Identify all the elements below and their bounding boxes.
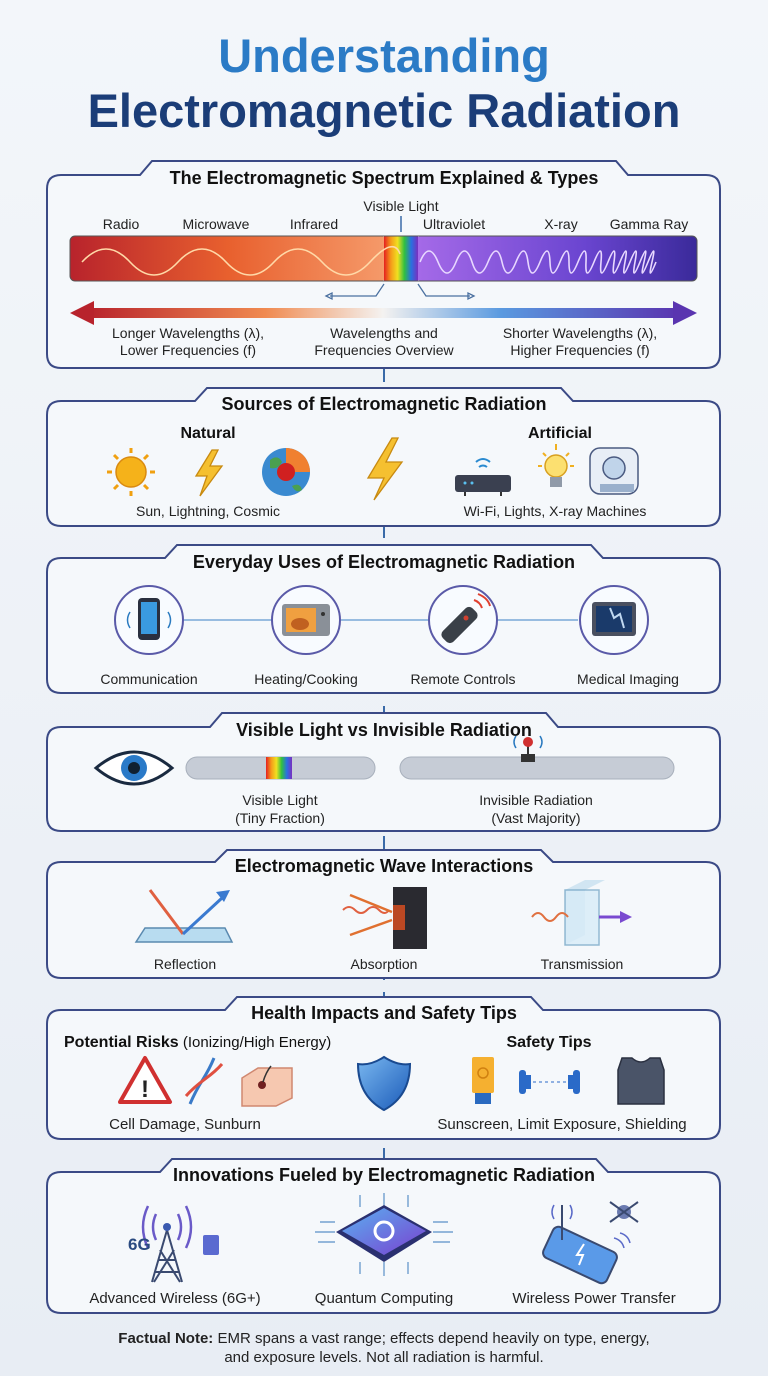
heading: uses: Everyday Uses of Electromagnetic Radiation (193, 552, 575, 572)
panel: innovations: Quantum Computing (315, 1290, 453, 1307)
spectrum labels: Infrared (290, 216, 338, 232)
panel: interactions: Absorption (351, 956, 417, 972)
heading: innovations: Innovations Fueled by Electromagnetic Radiation (173, 1165, 595, 1185)
panel: sources: Sun, Lightning, Cosmic (136, 503, 280, 519)
panel: interactions (47, 850, 720, 978)
heading: spectrum: The Electromagnetic Spectrum Explained & Types (170, 168, 598, 188)
icon: 6G tower: 6G (128, 1235, 151, 1254)
icon: wireless power (541, 1202, 638, 1285)
footer note: and exposure levels. Not all radiation is harmful. (224, 1349, 544, 1366)
heading: visible: Visible Light vs Invisible Radiation (236, 720, 532, 740)
icon: earth (262, 448, 310, 496)
icon: sun (107, 448, 155, 496)
spectrum labels: X-ray (544, 216, 578, 232)
icon: bulb (538, 444, 574, 487)
icon: reflection (136, 890, 232, 942)
text: spectrum captions: Longer Wavelengths (λ), (112, 325, 264, 341)
panel: health: Safety Tips (506, 1034, 592, 1051)
icon: eye (96, 752, 172, 784)
icon: warning: ! (141, 1076, 149, 1103)
panel: everyday uses: Remote Controls (410, 671, 516, 687)
spectrum bar (70, 236, 697, 281)
panel: everyday uses: Heating/Cooking (254, 671, 358, 687)
icon: phone (128, 598, 170, 640)
panel: sources: Artificial (528, 425, 592, 442)
heading: interactions: Electromagnetic Wave Interactions (235, 856, 533, 876)
icon: warning (120, 1058, 170, 1103)
panel: interactions: Transmission (541, 956, 623, 972)
icon: router (455, 459, 511, 496)
bar: invisible (400, 736, 674, 779)
spectrum labels: Visible Light (363, 198, 439, 214)
icon: sunscreen (472, 1057, 494, 1104)
panel: health: Potential Risks (Ionizing/High Energy) (64, 1034, 331, 1051)
panel: health: Cell Damage, Sunburn (109, 1116, 261, 1133)
icon: microwave (282, 604, 330, 636)
icon: quantum chip (315, 1193, 453, 1276)
spectrum labels (103, 198, 688, 232)
panel: health: Sunscreen, Limit Exposure, Shielding (437, 1116, 687, 1133)
panel: visible vs invisible: Visible Light (242, 792, 318, 808)
icon: medical screen (592, 602, 636, 636)
connector line (383, 368, 385, 1172)
panel: innovations: Wireless Power Transfer (512, 1290, 676, 1307)
text: spectrum captions: Frequencies Overview (314, 342, 455, 358)
spectrum labels: Microwave (183, 216, 250, 232)
icon: lightning (196, 450, 222, 496)
footer note (118, 1330, 650, 1366)
icon: center lightning (368, 438, 402, 500)
icon: remote (439, 594, 490, 645)
panel: interactions: Reflection (154, 956, 216, 972)
spectrum labels: Radio (103, 216, 139, 232)
heading: sources: Sources of Electromagnetic Radiation (221, 394, 547, 414)
text: spectrum captions: Shorter Wavelengths (λ), (503, 325, 657, 341)
arrow: wavelength direction (70, 301, 697, 325)
icon: dna (186, 1058, 222, 1104)
text: spectrum captions: Wavelengths and (330, 325, 438, 341)
icon: absorption (343, 887, 427, 949)
text: spectrum captions: Higher Frequencies (f) (510, 342, 650, 358)
text: spectrum captions: Lower Frequencies (f) (120, 342, 256, 358)
heading: health: Health Impacts and Safety Tips (251, 1003, 517, 1023)
panel: spectrum (47, 161, 720, 368)
spectrum labels: Gamma Ray (610, 216, 688, 232)
panel: sources: Wi-Fi, Lights, X-ray Machines (464, 503, 646, 519)
panel: visible vs invisible: (Tiny Fraction) (235, 810, 325, 826)
panel: everyday uses: Medical Imaging (577, 671, 679, 687)
icon: xray machine (590, 448, 638, 494)
panel: sources (47, 388, 720, 526)
title: Electromagnetic Radiation (88, 84, 680, 137)
spectrum labels: Ultraviolet (423, 216, 485, 232)
panel: visible vs invisible: (Vast Majority) (491, 810, 581, 826)
icon: vest (618, 1058, 664, 1104)
panel: everyday uses (47, 545, 720, 693)
icon: shield (358, 1057, 410, 1110)
panel: innovations (47, 1159, 720, 1313)
icon: skin (242, 1066, 292, 1106)
panel: visible vs invisible (47, 713, 720, 831)
panel: innovations: Advanced Wireless (6G+) (89, 1290, 261, 1307)
text: spectrum captions (112, 325, 657, 358)
panel: visible vs invisible: Invisible Radiation (479, 792, 593, 808)
icon: distance (519, 1070, 580, 1094)
title (88, 29, 680, 137)
icon: transmission (532, 880, 632, 945)
panel: everyday uses: Communication (100, 671, 198, 687)
bar: visible (186, 757, 375, 779)
panel: health (47, 997, 720, 1139)
title: Understanding (218, 29, 550, 82)
icon: 6G tower (128, 1206, 219, 1282)
footer note: Factual Note: EMR spans a vast range; effects depend heavily on type, energy, (118, 1330, 650, 1347)
panel: sources: Natural (180, 425, 236, 442)
